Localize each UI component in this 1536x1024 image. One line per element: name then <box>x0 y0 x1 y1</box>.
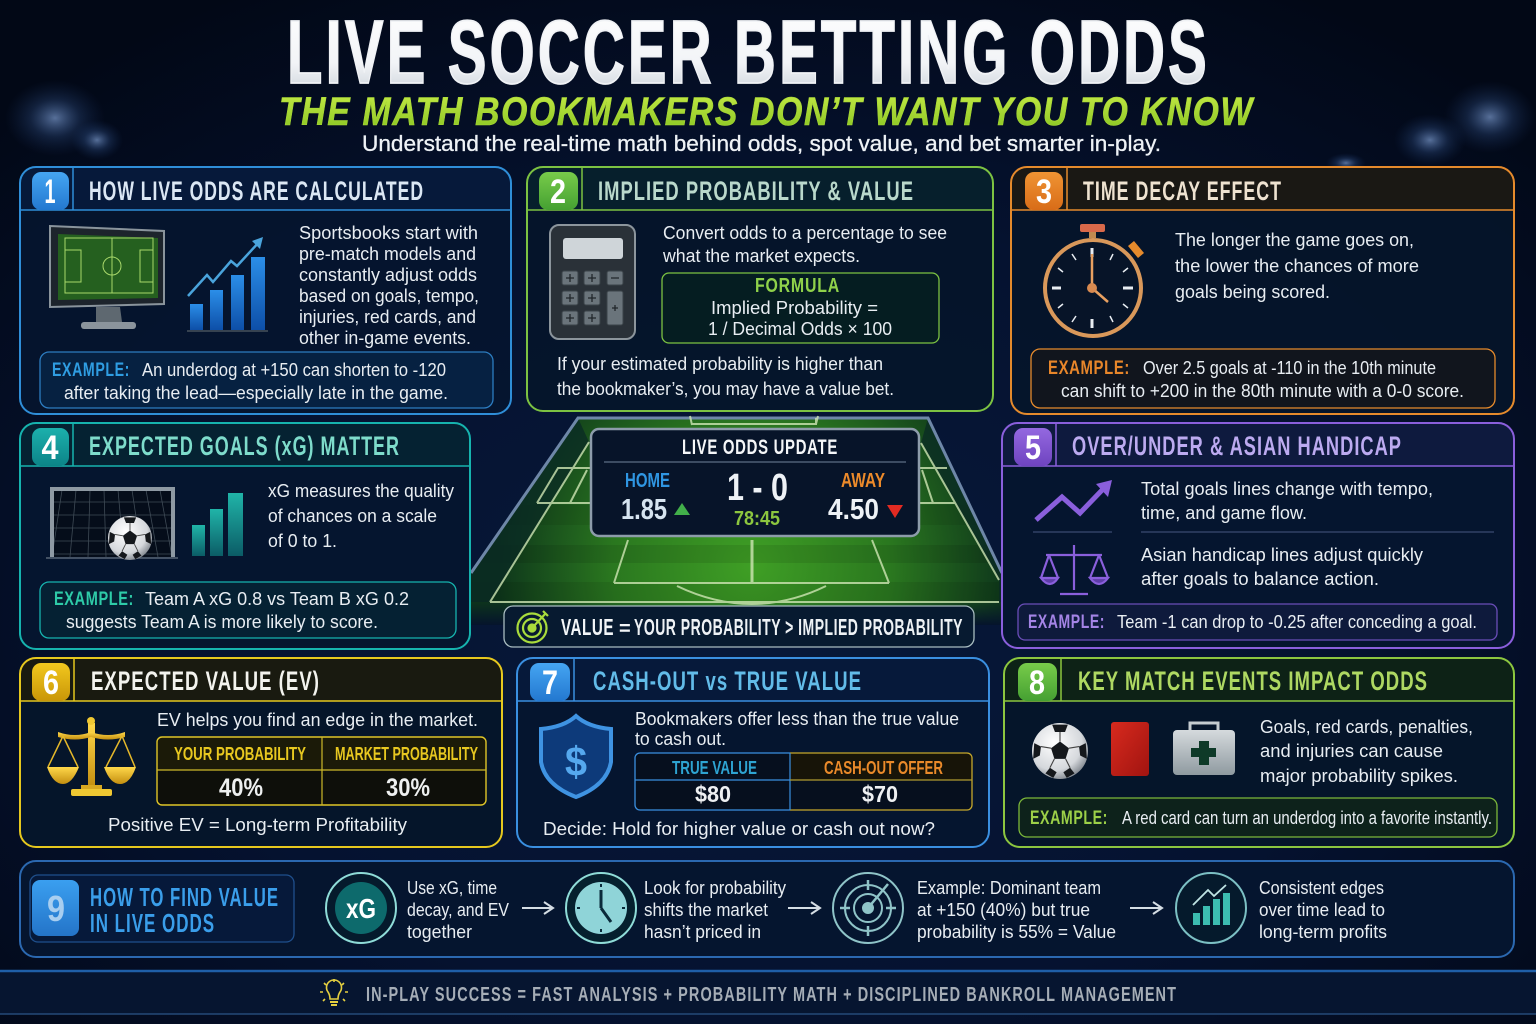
text block <box>1175 230 1419 302</box>
section heading box: IN LIVE ODDS <box>90 908 215 938</box>
probability table: YOUR PROBABILITY <box>174 744 306 764</box>
text block: goals being scored. <box>1175 282 1330 302</box>
icon: target <box>518 611 548 642</box>
number badge 4 <box>32 428 69 467</box>
probability table: 30% <box>386 774 430 802</box>
subtitle: THE MATH BOOKMAKERS DON’T WANT YOU TO KNOW <box>279 90 1255 134</box>
example box <box>40 582 456 638</box>
value table <box>635 753 972 810</box>
number badge 7: 7 <box>542 664 558 702</box>
example box <box>1031 349 1495 408</box>
panel 3: time decay effect <box>1011 167 1514 414</box>
text block <box>268 481 454 551</box>
icon: xG circle <box>326 873 396 943</box>
text block: and injuries can cause <box>1260 741 1443 761</box>
panel 6: expected value <box>20 658 502 847</box>
step 1 text: decay, and EV <box>407 900 509 920</box>
icon: shield with dollar: $ <box>565 738 587 785</box>
text block: to cash out. <box>635 729 726 749</box>
text block: other in-game events. <box>299 328 471 348</box>
panel 4: expected goals <box>20 423 470 649</box>
text block: Asian handicap lines adjust quickly <box>1141 545 1423 565</box>
panel 7: cash-out vs true value <box>517 658 989 847</box>
example box: EXAMPLE: <box>1030 808 1108 829</box>
example box: EXAMPLE: <box>54 589 134 610</box>
value equation bar: YOUR PROBABILITY > IMPLIED PROBABILITY <box>634 614 963 640</box>
example box: EXAMPLE: <box>52 360 130 381</box>
step 2 text: Look for probability <box>644 878 786 898</box>
number badge 1 <box>32 172 69 211</box>
icon: red card <box>1111 722 1149 776</box>
probability table: MARKET PROBABILITY <box>335 744 478 764</box>
icon: light bulb <box>320 979 348 1005</box>
icon: medical kit <box>1173 723 1235 775</box>
formula box: 1 / Decimal Odds × 100 <box>708 319 892 339</box>
heading: HOW LIVE ODDS ARE CALCULATED <box>89 176 424 206</box>
value table: TRUE VALUE <box>672 758 757 778</box>
text block <box>1260 717 1473 786</box>
heading: EXPECTED VALUE (EV) <box>91 666 320 696</box>
icon: clock circle <box>566 873 636 943</box>
heading: TIME DECAY EFFECT <box>1083 176 1282 206</box>
panel 5: over under and asian handicap <box>1002 423 1514 648</box>
step 4 text: Consistent edges <box>1259 878 1384 898</box>
example box: suggests Team A is more likely to score. <box>66 612 378 632</box>
formula box: Implied Probability = <box>711 298 878 318</box>
icon: rising bar chart <box>187 237 268 331</box>
text block <box>1141 479 1433 589</box>
number badge 3: 3 <box>1036 173 1052 211</box>
scoreboard: live odds update: HOME <box>625 470 670 492</box>
step 2 text: shifts the market <box>644 900 768 920</box>
example box: EXAMPLE: <box>1048 358 1130 379</box>
tagline: Understand the real-time math behind odds, spot value, and bet smarter in-play. <box>362 131 1161 156</box>
step 1 text <box>407 878 509 942</box>
number badge 3 <box>1025 172 1063 211</box>
step 2 text: hasn’t priced in <box>644 922 761 942</box>
probability table: 40% <box>219 774 263 802</box>
footer band <box>0 971 1536 1014</box>
arrow <box>788 902 820 914</box>
step 2 text <box>644 878 786 942</box>
value table: $80 <box>695 781 731 807</box>
section heading box: HOW TO FIND VALUE <box>90 882 279 912</box>
text block: after goals to balance action. <box>1141 569 1379 589</box>
text: Positive EV = Long-term Profitability <box>108 815 407 835</box>
number badge 8 <box>1018 663 1057 702</box>
icon: chart circle <box>1176 873 1246 943</box>
icon: xG circle: xG <box>346 893 376 924</box>
text block: major probability spikes. <box>1260 766 1458 786</box>
text block: constantly adjust odds <box>299 265 477 285</box>
value equation bar: = <box>619 618 631 640</box>
text: Decide: Hold for higher value or cash out now? <box>543 819 935 839</box>
text block: pre-match models and <box>299 244 476 264</box>
scoreboard: live odds update <box>591 429 919 536</box>
text block <box>557 354 894 399</box>
probability table <box>157 737 486 805</box>
step 3 text: at +150 (40%) but true <box>917 900 1090 920</box>
text block: what the market expects. <box>662 246 860 266</box>
text block <box>635 709 959 749</box>
arrow <box>1130 902 1162 914</box>
icon: stopwatch <box>1045 224 1144 336</box>
panel 9: how to find value <box>20 861 1514 957</box>
icon: purple scales <box>1041 545 1108 594</box>
scoreboard: live odds update: 1.85 <box>621 494 667 526</box>
text block: Sportsbooks start with <box>299 223 478 243</box>
example box: after taking the lead—especially late in the game. <box>64 383 448 403</box>
icon: trend line <box>1036 480 1112 520</box>
scoreboard: live odds update: 4.50 <box>828 494 879 526</box>
arrow <box>522 902 553 914</box>
number badge 1: 1 <box>44 173 56 211</box>
step 1 text: Use xG, time <box>407 878 497 898</box>
step 4 text: over time lead to <box>1259 900 1385 920</box>
icon: goal and ball <box>46 489 178 560</box>
example box: Team A xG 0.8 vs Team B xG 0.2 <box>145 589 409 609</box>
value table: CASH-OUT OFFER <box>824 758 943 778</box>
panel 8: key match events <box>1004 658 1514 847</box>
icon: shield with dollar <box>541 716 611 797</box>
text: EV helps you find an edge in the market. <box>157 710 478 730</box>
scoreboard: live odds update: 78:45 <box>734 508 780 530</box>
text block: If your estimated probability is higher than <box>557 354 883 374</box>
step 3 text: probability is 55% = Value <box>917 922 1116 942</box>
heading: CASH-OUT vs TRUE VALUE <box>593 666 862 696</box>
text block: Bookmakers offer less than the true value <box>635 709 959 729</box>
number badge 7 <box>530 663 570 702</box>
example box <box>1018 604 1497 640</box>
icon: monitor with pitch <box>50 226 164 329</box>
value equation bar: VALUE <box>561 614 614 640</box>
icon: calculator <box>550 225 635 339</box>
section heading box: 9 <box>47 888 65 929</box>
text block: Goals, red cards, penalties, <box>1260 717 1473 737</box>
text block: Convert odds to a percentage to see <box>663 223 947 243</box>
value equation bar <box>504 606 974 647</box>
text block: time, and game flow. <box>1141 503 1307 523</box>
text block: of 0 to 1. <box>268 531 337 551</box>
icon: gold scales <box>47 717 136 796</box>
panel: center pitch and scoreboard <box>470 416 1002 647</box>
example box <box>40 352 493 408</box>
step 3 text <box>917 878 1116 942</box>
text block: of chances on a scale <box>268 506 437 526</box>
section heading box <box>30 875 294 942</box>
heading: IMPLIED PROBABILITY & VALUE <box>598 176 914 206</box>
text block: Total goals lines change with tempo, <box>1141 479 1433 499</box>
example box: can shift to +200 in the 80th minute with a 0-0 score. <box>1061 381 1464 401</box>
panel 1: how live odds are calculated <box>20 167 511 414</box>
example box: An underdog at +150 can shorten to -120 <box>142 360 446 380</box>
step 1 text: together <box>407 922 472 942</box>
text block <box>662 223 947 266</box>
text block: injuries, red cards, and <box>299 307 476 327</box>
scoreboard: live odds update: AWAY <box>841 470 886 492</box>
number badge 4: 4 <box>42 429 59 467</box>
number badge 2: 2 <box>550 173 566 211</box>
footer text: IN-PLAY SUCCESS = FAST ANALYSIS + PROBABILITY MATH + DISCIPLINED BANKROLL MANAGEMENT <box>366 984 1177 1006</box>
text block: The longer the game goes on, <box>1175 230 1414 250</box>
number badge 6: 6 <box>43 664 59 702</box>
number badge 8: 8 <box>1029 664 1045 702</box>
heading: EXPECTED GOALS (xG) MATTER <box>89 431 400 461</box>
text block <box>299 223 479 348</box>
number badge 2 <box>539 172 578 211</box>
number badge 6 <box>32 663 70 702</box>
example box: Team -1 can drop to -0.25 after conceding a goal. <box>1117 612 1477 632</box>
icon: teal bars <box>192 493 243 556</box>
example box <box>1019 798 1497 837</box>
panel 2: implied probability and value <box>527 167 993 411</box>
scoreboard: live odds update: LIVE ODDS UPDATE <box>682 436 838 459</box>
step 4 text <box>1259 878 1387 942</box>
number badge 5: 5 <box>1025 429 1041 467</box>
scoreboard: live odds update: 1 - 0 <box>727 467 788 509</box>
step 3 text: Example: Dominant team <box>917 878 1101 898</box>
icon: target circle <box>833 873 903 943</box>
example box: EXAMPLE: <box>1028 612 1105 633</box>
text block: based on goals, tempo, <box>299 286 479 306</box>
text block: the bookmaker’s, you may have a value bet. <box>557 379 894 399</box>
pitch illustration <box>470 416 1002 625</box>
text block: xG measures the quality <box>268 481 454 501</box>
formula box: FORMULA <box>755 275 840 297</box>
icon: soccer ball <box>1032 723 1088 779</box>
value table: $70 <box>862 781 898 807</box>
step 4 text: long-term profits <box>1259 922 1387 942</box>
number badge 5 <box>1014 428 1052 467</box>
example box: Over 2.5 goals at -110 in the 10th minute <box>1143 358 1436 378</box>
formula box <box>662 273 939 343</box>
text block: the lower the chances of more <box>1175 256 1419 276</box>
